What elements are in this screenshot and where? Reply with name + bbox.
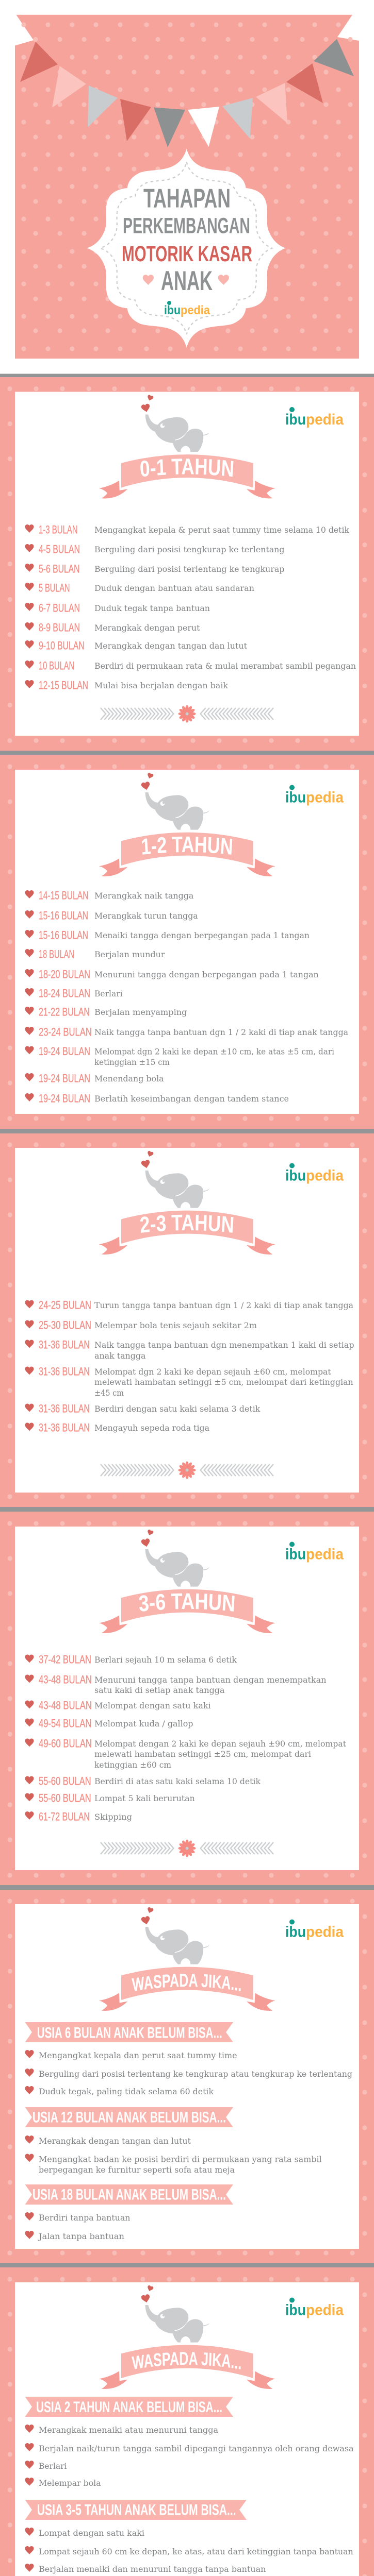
milestone row: ±45 cm bbox=[94, 1388, 124, 1398]
logo: ibupedia: pedia bbox=[181, 303, 210, 317]
milestone row bbox=[25, 679, 229, 691]
milestone row bbox=[25, 928, 310, 942]
milestone row bbox=[25, 1673, 327, 1695]
milestone row bbox=[25, 1092, 289, 1105]
logo bbox=[285, 407, 344, 428]
logo: pedia bbox=[306, 411, 344, 428]
warning item: Mengangkat kepala dan perut saat tummy time bbox=[39, 2051, 237, 2060]
milestone row bbox=[25, 1699, 211, 1711]
sub-heading banner bbox=[25, 2500, 247, 2520]
milestone row bbox=[25, 659, 356, 672]
milestone row: 10 BULAN bbox=[39, 659, 74, 672]
milestone row: 15-16 BULAN bbox=[39, 928, 88, 942]
milestone row: 31-36 BULAN bbox=[39, 1421, 90, 1434]
milestone row: 61-72 BULAN bbox=[39, 1810, 90, 1823]
milestone row bbox=[25, 1045, 334, 1067]
icon: hearts beside title bbox=[143, 275, 229, 285]
warning item: Merangkak menaiki atau menuruni tangga bbox=[39, 2426, 218, 2435]
flower divider bbox=[101, 1839, 273, 1857]
milestone row: Skipping bbox=[94, 1812, 132, 1822]
warning item bbox=[25, 2461, 67, 2471]
sub-heading banner bbox=[25, 2022, 233, 2042]
logo bbox=[285, 785, 344, 806]
milestone row: 8-9 BULAN bbox=[39, 621, 80, 634]
milestone row bbox=[25, 1402, 261, 1415]
milestone row: Berdiri dengan satu kaki selama 3 detik bbox=[94, 1404, 261, 1414]
title text: TAHAPAN bbox=[143, 184, 231, 214]
milestone row: Menendang bola bbox=[94, 1074, 164, 1083]
milestone row: Melompat dengan satu kaki bbox=[94, 1701, 211, 1710]
milestone row: 25-30 BULAN bbox=[39, 1319, 91, 1331]
sub-heading banner: USIA 2 TAHUN ANAK BELUM BISA... bbox=[36, 2399, 222, 2416]
sub-heading banner: USIA 3-5 TAHUN ANAK BELUM BISA... bbox=[37, 2502, 236, 2519]
milestone row: 6-7 BULAN bbox=[39, 602, 80, 614]
milestone row: 49-54 BULAN bbox=[39, 1717, 92, 1730]
ribbon bbox=[99, 1211, 275, 1255]
milestone row bbox=[25, 1025, 348, 1039]
warning item: Jalan tanpa bantuan bbox=[38, 2232, 124, 2241]
hero background bbox=[15, 15, 359, 359]
panel: waspada jika 1 bbox=[7, 1899, 367, 2256]
milestone row bbox=[25, 543, 285, 555]
heading: WASPADA JIKA... bbox=[132, 2352, 241, 2369]
warning item: Berjalan naik/turun tangga sambil dipegangi tangannya oleh orang dewasa bbox=[39, 2444, 354, 2453]
milestone row: 18-20 BULAN bbox=[39, 968, 90, 981]
milestone row: Melompat dengan 2 kaki ke depan sejauh ±90 cm, melompat bbox=[94, 1739, 347, 1749]
milestone row bbox=[25, 581, 254, 595]
milestone row: 31-36 BULAN bbox=[39, 1365, 90, 1378]
milestone row: melewati hambatan setinggi ±5 cm, melompat dari ketinggian bbox=[94, 1378, 353, 1387]
warning item: Berjalan menaiki dan menuruni tangga tanpa bantuan bbox=[39, 2565, 266, 2574]
milestone row: 9-10 BULAN bbox=[39, 639, 85, 652]
icon: elephant with hearts bbox=[141, 1529, 209, 1587]
sub-heading banner: USIA 6 BULAN ANAK BELUM BISA... bbox=[37, 2025, 222, 2042]
milestone row bbox=[25, 1774, 261, 1788]
heading: 1-2 TAHUN bbox=[142, 837, 232, 855]
logo bbox=[285, 2298, 344, 2318]
milestone row: 31-36 BULAN bbox=[39, 1402, 90, 1415]
milestone row: Melompat dgn 2 kaki ke depan ±10 cm, ke atas ±5 cm, dari bbox=[94, 1047, 334, 1056]
milestone row: 12-15 BULAN bbox=[39, 679, 88, 691]
milestone row: Berjalan mundur bbox=[94, 950, 165, 959]
milestone row: satu kaki di setiap anak tangga bbox=[94, 1686, 225, 1695]
heading: 0-1 TAHUN bbox=[140, 459, 233, 477]
milestone row: 18 BULAN bbox=[39, 948, 74, 960]
milestone row bbox=[25, 1365, 353, 1398]
milestone row bbox=[25, 639, 248, 652]
logo bbox=[285, 1163, 344, 1184]
ribbon bbox=[99, 1967, 275, 2011]
logo bbox=[285, 1920, 344, 1940]
milestone row: Merangkak dengan perut bbox=[94, 623, 200, 633]
milestone row: 24-25 BULAN bbox=[39, 1298, 91, 1312]
icon: elephant with hearts bbox=[141, 1907, 209, 1964]
milestone row bbox=[25, 1792, 195, 1804]
warning item: Lompat dengan satu kaki bbox=[39, 2529, 144, 2538]
title text: PERKEMBANGAN bbox=[123, 214, 250, 239]
panel: hero cover bbox=[15, 15, 359, 359]
milestone row bbox=[25, 1072, 164, 1085]
milestone row: anak tangga bbox=[94, 1351, 145, 1361]
milestone row: Melompat kuda / gallop bbox=[94, 1719, 193, 1728]
flower divider bbox=[101, 1461, 273, 1479]
milestone row: Mengangkat kepala & perut saat tummy time selama 10 detik bbox=[94, 526, 350, 535]
milestone row bbox=[25, 1737, 347, 1770]
ribbon bbox=[99, 454, 275, 498]
warning item: berpegangan ke furnitur seperti sofa atau meja bbox=[39, 2165, 235, 2175]
milestone row: Naik tangga tanpa bantuan dgn menempatkan 1 kaki di setiap bbox=[94, 1341, 354, 1350]
milestone row: Berlatih keseimbangan dengan tandem stance bbox=[94, 1094, 289, 1104]
warning item: Merangkak dengan tangan dan lutut bbox=[39, 2137, 191, 2146]
milestone row: 15-16 BULAN bbox=[39, 909, 88, 922]
title badge bbox=[87, 148, 285, 348]
milestone row bbox=[25, 1319, 257, 1331]
milestone row: Berguling dari posisi tengkurap ke terlentang bbox=[94, 545, 285, 554]
panel: waspada jika 2 bbox=[7, 2277, 367, 2576]
milestone row bbox=[25, 523, 350, 536]
sub-heading banner: USIA 12 BULAN ANAK BELUM BISA... bbox=[32, 2109, 226, 2126]
panel: 3-6 tahun bbox=[7, 1521, 367, 1877]
warning item: Lompat sejauh 60 cm ke depan, ke atas, atau dari ketinggian tanpa bantuan bbox=[39, 2547, 353, 2556]
milestone row: melewati hambatan setinggi ±25 cm, melompat dari bbox=[94, 1750, 311, 1759]
milestone row: Duduk dengan bantuan atau sandaran bbox=[94, 584, 254, 593]
warning item bbox=[25, 2154, 322, 2175]
milestone row bbox=[25, 1298, 353, 1312]
logo: ibu bbox=[285, 2302, 306, 2318]
milestone row bbox=[25, 1717, 193, 1730]
logo: pedia bbox=[306, 789, 344, 806]
sub-heading banner bbox=[25, 2107, 233, 2127]
milestone row: Menuruni tangga dengan berpegangan pada 1 tangan bbox=[94, 970, 319, 979]
milestone row: 31-36 BULAN bbox=[39, 1338, 90, 1351]
milestone row: 19-24 BULAN bbox=[39, 1092, 90, 1105]
milestone row bbox=[25, 889, 193, 902]
milestone row: 43-48 BULAN bbox=[39, 1673, 92, 1686]
logo: ibupedia bbox=[164, 301, 210, 317]
milestone row: Mengayuh sepeda roda tiga bbox=[94, 1423, 209, 1433]
milestone row bbox=[25, 948, 165, 960]
logo: ibu bbox=[285, 1924, 306, 1940]
milestone row: 43-48 BULAN bbox=[39, 1699, 92, 1711]
milestone row: 18-24 BULAN bbox=[39, 987, 90, 999]
milestone row bbox=[25, 1338, 354, 1361]
milestone row: ketinggian ±60 cm bbox=[94, 1760, 171, 1770]
warning item: Mengangkat badan ke posisi berdiri di permukaan yang rata sambil bbox=[39, 2155, 322, 2164]
milestone row bbox=[25, 1421, 209, 1434]
milestone row: 19-24 BULAN bbox=[39, 1045, 90, 1058]
logo: pedia bbox=[306, 1924, 344, 1940]
heading: 2-3 TAHUN bbox=[140, 1215, 233, 1233]
logo: ibu bbox=[285, 411, 306, 428]
logo bbox=[285, 1541, 344, 1563]
milestone row bbox=[25, 968, 319, 981]
milestone row: Menuruni tangga tanpa bantuan dengan menempatkan bbox=[94, 1675, 327, 1685]
icon: elephant with hearts bbox=[141, 395, 209, 452]
panel: 2-3 tahun bbox=[7, 1143, 367, 1499]
flower divider bbox=[101, 705, 273, 722]
milestone row: Berdiri di permukaan rata & mulai merambat sambil pegangan bbox=[94, 662, 356, 671]
bunting flags bbox=[20, 39, 354, 147]
icon: elephant with hearts bbox=[141, 1150, 209, 1208]
title text: ANAK bbox=[161, 266, 213, 296]
milestone row: 1-3 BULAN bbox=[39, 523, 78, 536]
milestone row: 55-60 BULAN bbox=[39, 1792, 91, 1804]
logo: ibu bbox=[285, 1167, 306, 1184]
milestone row: 4-5 BULAN bbox=[39, 543, 80, 555]
milestone row bbox=[25, 563, 285, 575]
ribbon bbox=[99, 833, 275, 876]
milestone row: 23-24 BULAN bbox=[39, 1025, 92, 1039]
logo: ibu bbox=[285, 789, 306, 806]
milestone row: Berlari bbox=[94, 989, 123, 998]
icon: elephant with hearts bbox=[141, 2285, 209, 2343]
milestone row: Menaiki tangga dengan berpegangan pada 1 tangan bbox=[94, 931, 310, 940]
milestone row bbox=[25, 1006, 187, 1018]
logo: pedia bbox=[306, 2302, 344, 2318]
milestone row bbox=[25, 909, 198, 922]
milestone row bbox=[25, 621, 200, 634]
milestone row: Berlari sejauh 10 m selama 6 detik bbox=[94, 1655, 237, 1665]
milestone row bbox=[25, 602, 210, 614]
milestone row: Berdiri di atas satu kaki selama 10 detik bbox=[94, 1777, 261, 1786]
milestone row: Merangkak dengan tangan dan lutut bbox=[94, 641, 248, 651]
milestone row: Berjalan menyamping bbox=[94, 1008, 187, 1017]
milestone row: 5-6 BULAN bbox=[39, 563, 79, 575]
milestone row: Merangkak naik tangga bbox=[94, 891, 193, 901]
warning item: Duduk tegak, paling tidak selama 60 detik bbox=[39, 2087, 214, 2096]
milestone row: ketinggian ±15 cm bbox=[94, 1058, 170, 1067]
sub-heading banner: USIA 18 BULAN ANAK BELUM BISA... bbox=[32, 2186, 226, 2203]
milestone row bbox=[25, 1653, 237, 1666]
milestone row: 37-42 BULAN bbox=[39, 1653, 91, 1666]
icon: elephant with hearts bbox=[141, 772, 209, 830]
milestone row: Naik tangga tanpa bantuan dgn 1 / 2 kaki di tiap anak tangga bbox=[94, 1028, 348, 1037]
milestone row: Melompat dgn 2 kaki ke depan sejauh ±60 cm, melompat bbox=[94, 1367, 331, 1377]
title text bbox=[122, 184, 252, 296]
heading: 3-6 TAHUN bbox=[139, 1593, 235, 1612]
milestone row: Melempar bola tenis sejauh sekitar 2m bbox=[94, 1321, 257, 1330]
warning item: Melempar bola bbox=[39, 2479, 101, 2488]
milestone row: Berguling dari posisi terlentang ke tengkurap bbox=[94, 565, 285, 574]
milestone row: 19-24 BULAN bbox=[39, 1072, 90, 1085]
sub-heading banner bbox=[25, 2184, 233, 2205]
milestone row: Lompat 5 kali berurutan bbox=[94, 1794, 195, 1803]
milestone row: Turun tangga tanpa bantuan dgn 1 / 2 kaki di tiap anak tangga bbox=[94, 1301, 353, 1310]
white top area behind hero bbox=[0, 0, 374, 374]
logo: ibu bbox=[285, 1546, 306, 1563]
panel: 0-1 tahun bbox=[7, 386, 367, 743]
milestone row: 55-60 BULAN bbox=[39, 1774, 91, 1788]
ribbon bbox=[99, 2345, 275, 2389]
sub-heading banner bbox=[25, 2397, 233, 2417]
milestone row: 49-60 BULAN bbox=[39, 1737, 92, 1750]
milestone row bbox=[25, 1810, 132, 1823]
panel: 1-2 tahun bbox=[7, 765, 367, 1121]
milestone row: Duduk tegak tanpa bantuan bbox=[94, 604, 210, 613]
logo: pedia bbox=[306, 1546, 344, 1563]
warning item: Berguling dari posisi terlentang ke tengkurap atau tengkurap ke terlentang bbox=[39, 2070, 352, 2079]
milestone row: 14-15 BULAN bbox=[39, 889, 89, 902]
milestone row: 21-22 BULAN bbox=[39, 1006, 90, 1018]
title text: MOTORIK KASAR bbox=[122, 242, 252, 266]
milestone row: Merangkak turun tangga bbox=[94, 911, 198, 921]
milestone row: Mulai bisa berjalan dengan baik bbox=[94, 681, 229, 690]
milestone row: 5 BULAN bbox=[39, 581, 70, 595]
warning item: Berdiri tanpa bantuan bbox=[39, 2213, 130, 2223]
warning item: Berlari bbox=[39, 2462, 67, 2471]
logo: pedia bbox=[306, 1167, 344, 1184]
heading: WASPADA JIKA... bbox=[132, 1974, 241, 1991]
ribbon bbox=[99, 1589, 275, 1633]
logo: ibupedia: ibu bbox=[164, 303, 181, 317]
